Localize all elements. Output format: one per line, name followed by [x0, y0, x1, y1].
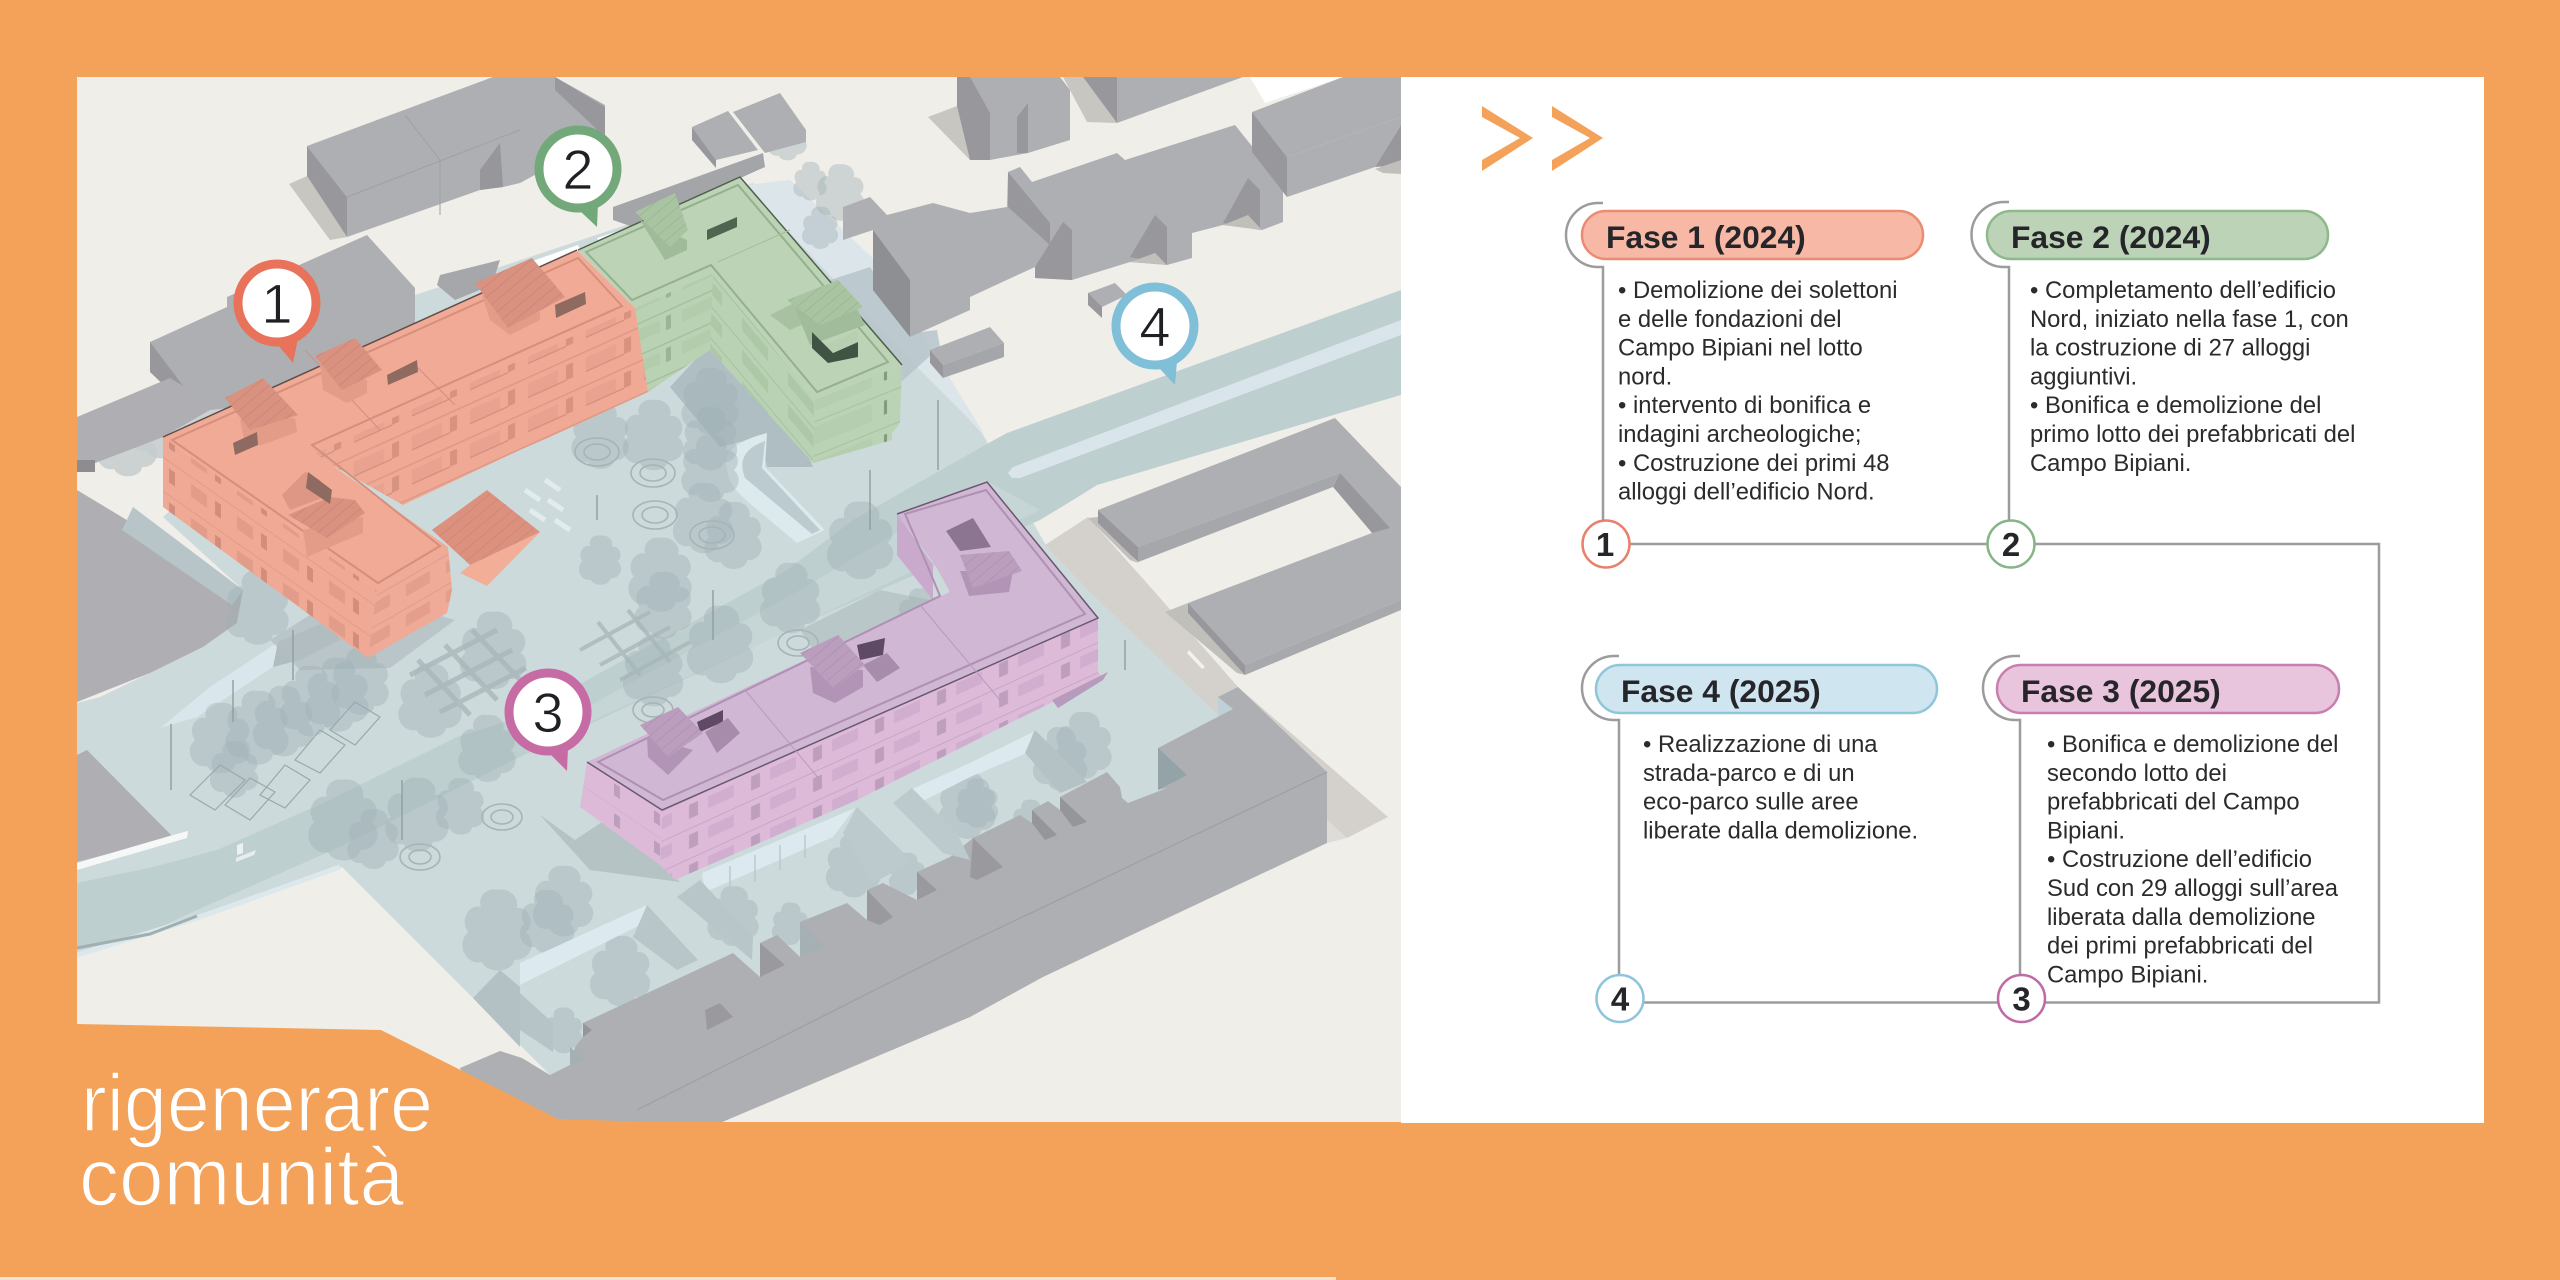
- panel: fase 4: strada-parco e di un: [1643, 760, 1855, 787]
- panel: fase 4: 4: [1611, 980, 1630, 1018]
- title: comunità: [79, 1132, 404, 1223]
- surrounding buildings north: [77, 77, 806, 472]
- panel: fase 1: Fase 1 (2024): [1606, 219, 1806, 255]
- pin 4: [1116, 287, 1194, 385]
- pin 3: 3: [532, 681, 564, 744]
- panel: fase 1: • Demolizione dei solettoni: [1618, 277, 1898, 304]
- panel: fase 2: 2: [2002, 526, 2020, 563]
- panel: fase 3: [1997, 665, 2345, 1022]
- panel: fase 1: indagini archeologiche;: [1618, 421, 1861, 448]
- building 3 south building phase 3: [580, 482, 1108, 880]
- panel: isometric site map: [77, 77, 1401, 1123]
- panel: fase 2: la costruzione di 27 alloggi: [2030, 335, 2310, 362]
- panel: fase 1: • intervento di bonifica e: [1618, 392, 1871, 419]
- orange corner over map: [77, 1024, 1401, 1130]
- surrounding buildings north east: [843, 77, 1401, 378]
- pin 1: [238, 264, 316, 363]
- road: park street: [77, 290, 1401, 955]
- timeline connector lines: [1566, 202, 2379, 1002]
- building 1 north wing phase 1: [163, 250, 648, 658]
- title: [79, 1058, 433, 1223]
- panel: fase 2: • Completamento dell’edificio: [2030, 277, 2336, 304]
- panel: fase 1: nord.: [1618, 363, 1672, 390]
- panel: fase 3: • Bonifica e demolizione del: [2047, 731, 2338, 758]
- pin 4: 4: [1139, 295, 1171, 358]
- icon: double chevron: [1482, 106, 1603, 171]
- panel: fase 3: 3: [2012, 980, 2031, 1018]
- pin 1: 1: [261, 272, 293, 335]
- panel: fase 3: liberata dalla demolizione: [2047, 904, 2316, 931]
- title: rigenerare: [81, 1058, 433, 1149]
- panel: fase 1: • Costruzione dei primi 48: [1618, 450, 1890, 477]
- park ripple elements and pavilion: [171, 400, 1125, 870]
- plaza ground: [77, 158, 1225, 1075]
- building and ramp shadows: [270, 347, 930, 882]
- panel: fase 1: e delle fondazioni del: [1618, 306, 1842, 333]
- south courtyards and glass walls: [473, 730, 1087, 1052]
- side road: [1045, 517, 1388, 843]
- panel: fase 2: aggiuntivi.: [2030, 363, 2137, 390]
- panel: fase 3: Bipiani.: [2047, 817, 2125, 844]
- panel: fase 2: Nord, iniziato nella fase 1, con: [2030, 306, 2349, 333]
- panel: fase 3: secondo lotto dei: [2047, 760, 2227, 787]
- panel: fase 1: alloggi dell’edificio Nord.: [1618, 479, 1875, 506]
- panel: fase 2: primo lotto dei prefabbricati del: [2030, 421, 2355, 448]
- grey wedge bottom left: [77, 750, 188, 870]
- panel: fase 2: Campo Bipiani.: [2030, 450, 2191, 477]
- panel: fase 2: • Bonifica e demolizione del: [2030, 392, 2321, 419]
- panel: fase 4: eco-parco sulle aree: [1643, 789, 1859, 816]
- light trees behind north building: [98, 408, 224, 476]
- canopy: [432, 490, 540, 586]
- panel: fase 4: liberate dalla demolizione.: [1643, 817, 1918, 844]
- white panel: [1401, 77, 2484, 1123]
- pin 2: [539, 130, 617, 227]
- panel: fase 1: 1: [1596, 526, 1614, 563]
- panel: fase 4: [1596, 665, 1937, 1022]
- panel: fase 3: prefabbricati del Campo: [2047, 789, 2300, 816]
- panel: fase 3: • Costruzione dell’edificio: [2047, 846, 2312, 873]
- trees: [190, 114, 1112, 1053]
- pin 2: 2: [562, 138, 594, 201]
- light strip at bottom edge: [0, 1277, 1336, 1280]
- panel: fase 4: Fase 4 (2025): [1621, 673, 1821, 709]
- pin 3: [509, 673, 587, 771]
- panel: fase 2: Fase 2 (2024): [2011, 219, 2211, 255]
- panel: fase 3: Fase 3 (2025): [2021, 673, 2221, 709]
- panel: fase 3: Sud con 29 alloggi sull’area: [2047, 875, 2339, 902]
- panel: fase 3: dei primi prefabbricati del: [2047, 933, 2313, 960]
- panel: fase 3: Campo Bipiani.: [2047, 961, 2208, 988]
- panel: fase 4: • Realizzazione di una: [1643, 731, 1878, 758]
- dormers north wing: [225, 258, 586, 557]
- building 2 north extension phase 2: [578, 177, 902, 463]
- panel: fase 2: [1987, 211, 2362, 568]
- panel: fase 1: [1582, 211, 1923, 568]
- panel: fase 1: Campo Bipiani nel lotto: [1618, 335, 1863, 362]
- block east of side road: [1088, 418, 1401, 675]
- south block: [460, 687, 1327, 1123]
